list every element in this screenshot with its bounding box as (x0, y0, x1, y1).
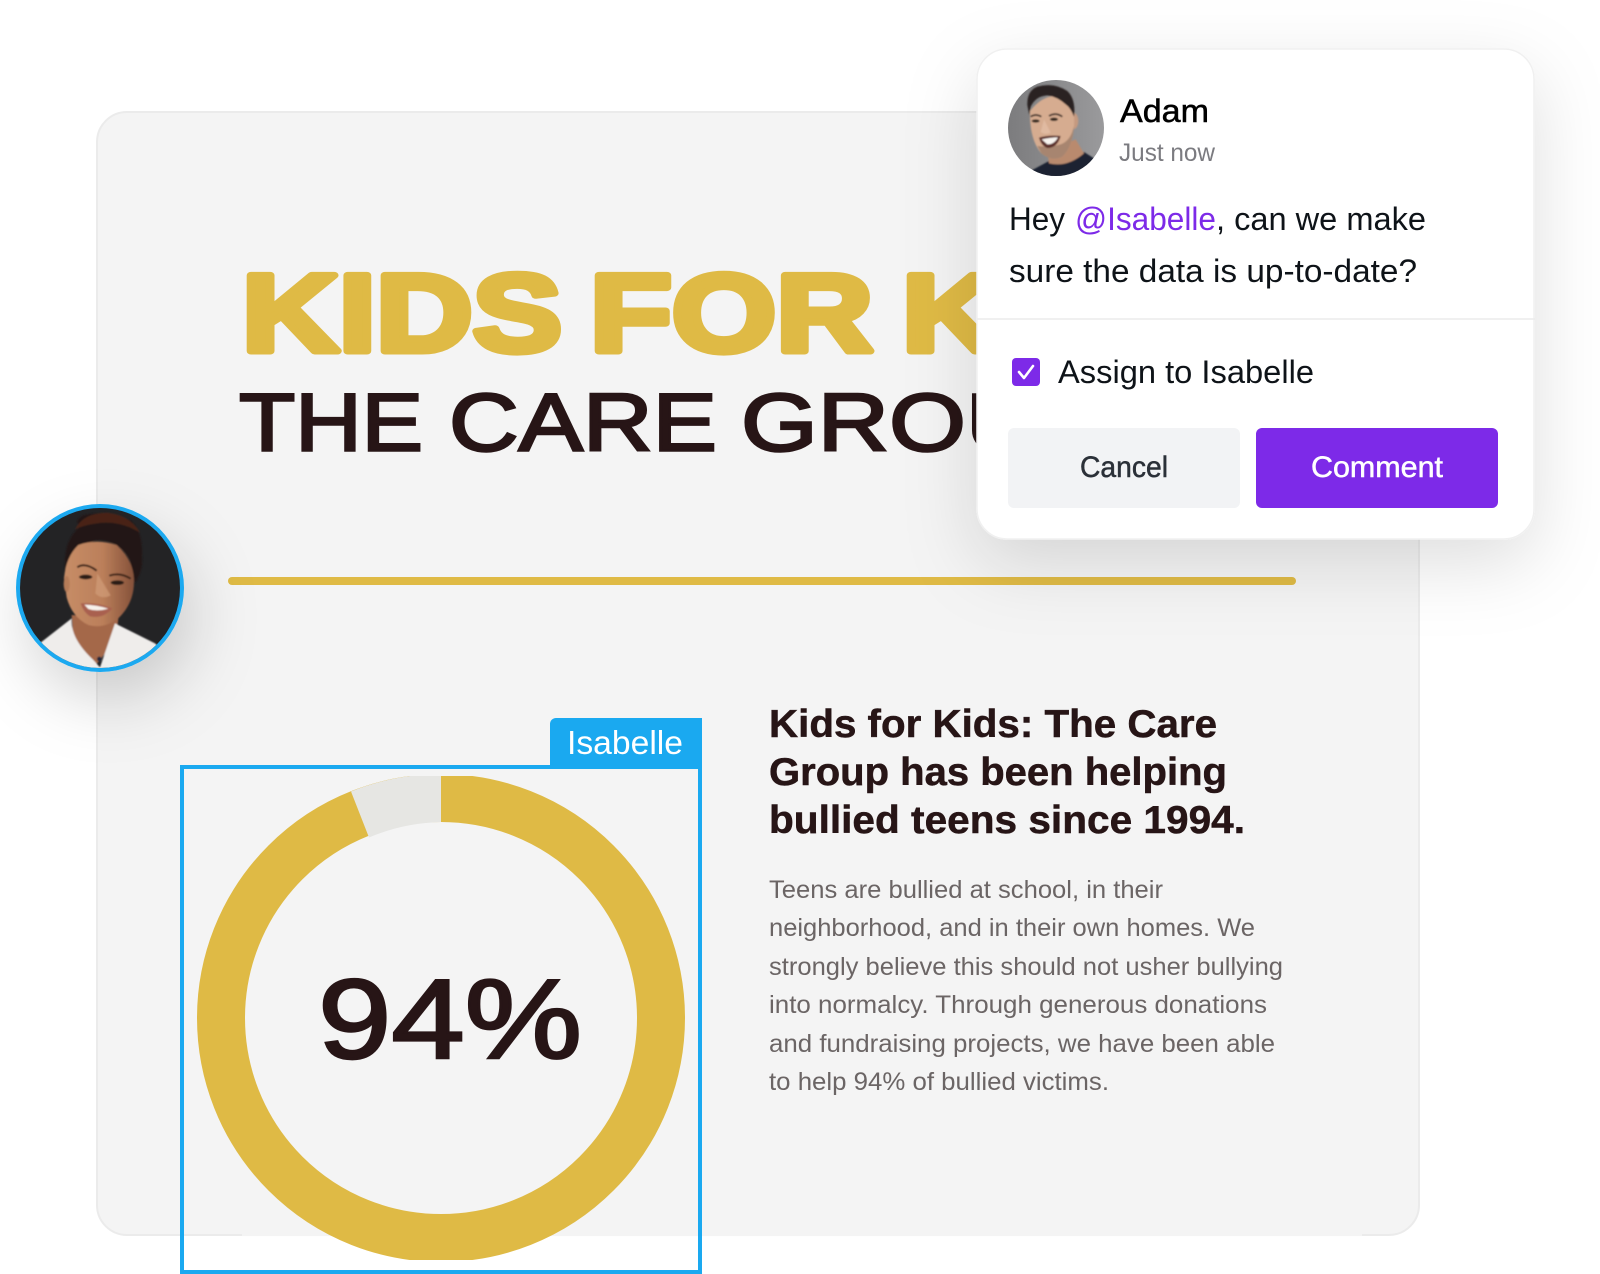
button: cancel: Cancel (1080, 451, 1168, 484)
comment message: , can we make (1216, 201, 1426, 237)
subtitle: The Care Group: THE (239, 378, 423, 468)
button: comment: Comment (1311, 451, 1444, 484)
chart value: 94% (318, 956, 582, 1082)
title: Kids for Kids: KIDS (242, 252, 562, 375)
avatar: Isabelle (16, 504, 184, 673)
panel: document background (97, 112, 1419, 1235)
donut ring: remaining share (351, 776, 441, 838)
assign label: Assign to Isabelle (1058, 354, 1314, 390)
panel: comment card (977, 49, 1535, 539)
heading: article headline: Group has been helping (769, 751, 1227, 794)
tab label: Isabelle (567, 724, 683, 761)
subtitle: The Care Group: GROUP (741, 378, 1103, 468)
text block: article body: Teens are bullied at school, in their (769, 876, 1163, 904)
button: comment (1256, 428, 1498, 508)
text block: article body (769, 876, 1283, 1096)
text block: article body: into normalcy. Through generous donations (769, 991, 1267, 1019)
commenter name: Adam (1120, 93, 1209, 129)
text block: article body: neighborhood, and in their own homes. We (769, 914, 1255, 942)
comment message: @Isabelle (1075, 201, 1216, 237)
comment message (1009, 201, 1426, 289)
heading: article headline: bullied teens since 1994. (769, 799, 1245, 842)
text block: article body: to help 94% of bullied victims. (769, 1068, 1109, 1096)
text block: article body: strongly believe this should not usher bullying (769, 953, 1283, 981)
title: Kids for Kids (242, 252, 1222, 375)
comment message: sure the data is up-to-date? (1009, 253, 1417, 289)
checkbox: assign (1012, 358, 1040, 386)
subtitle: The Care Group (239, 378, 1103, 468)
button: cancel (1008, 428, 1240, 508)
text block: article body: and fundraising projects, we have been able (769, 1030, 1275, 1058)
heading: article headline: Kids for Kids: The Care (769, 703, 1217, 746)
donut ring: gold share (221, 798, 661, 1238)
title: Kids for Kids: FOR (590, 252, 873, 375)
avatar: Adam (1008, 80, 1104, 183)
selection tab (550, 718, 702, 766)
selection frame: Isabelle (182, 718, 702, 1272)
divider bar: gold (228, 577, 1296, 585)
chart: 94% donut (221, 776, 661, 1238)
title: Kids for Kids: KIDS (902, 252, 1222, 375)
timestamp: Just now (1119, 139, 1216, 167)
heading: article headline (769, 703, 1245, 842)
comment message: Hey (1009, 201, 1065, 237)
subtitle: The Care Group: CARE (449, 378, 717, 468)
